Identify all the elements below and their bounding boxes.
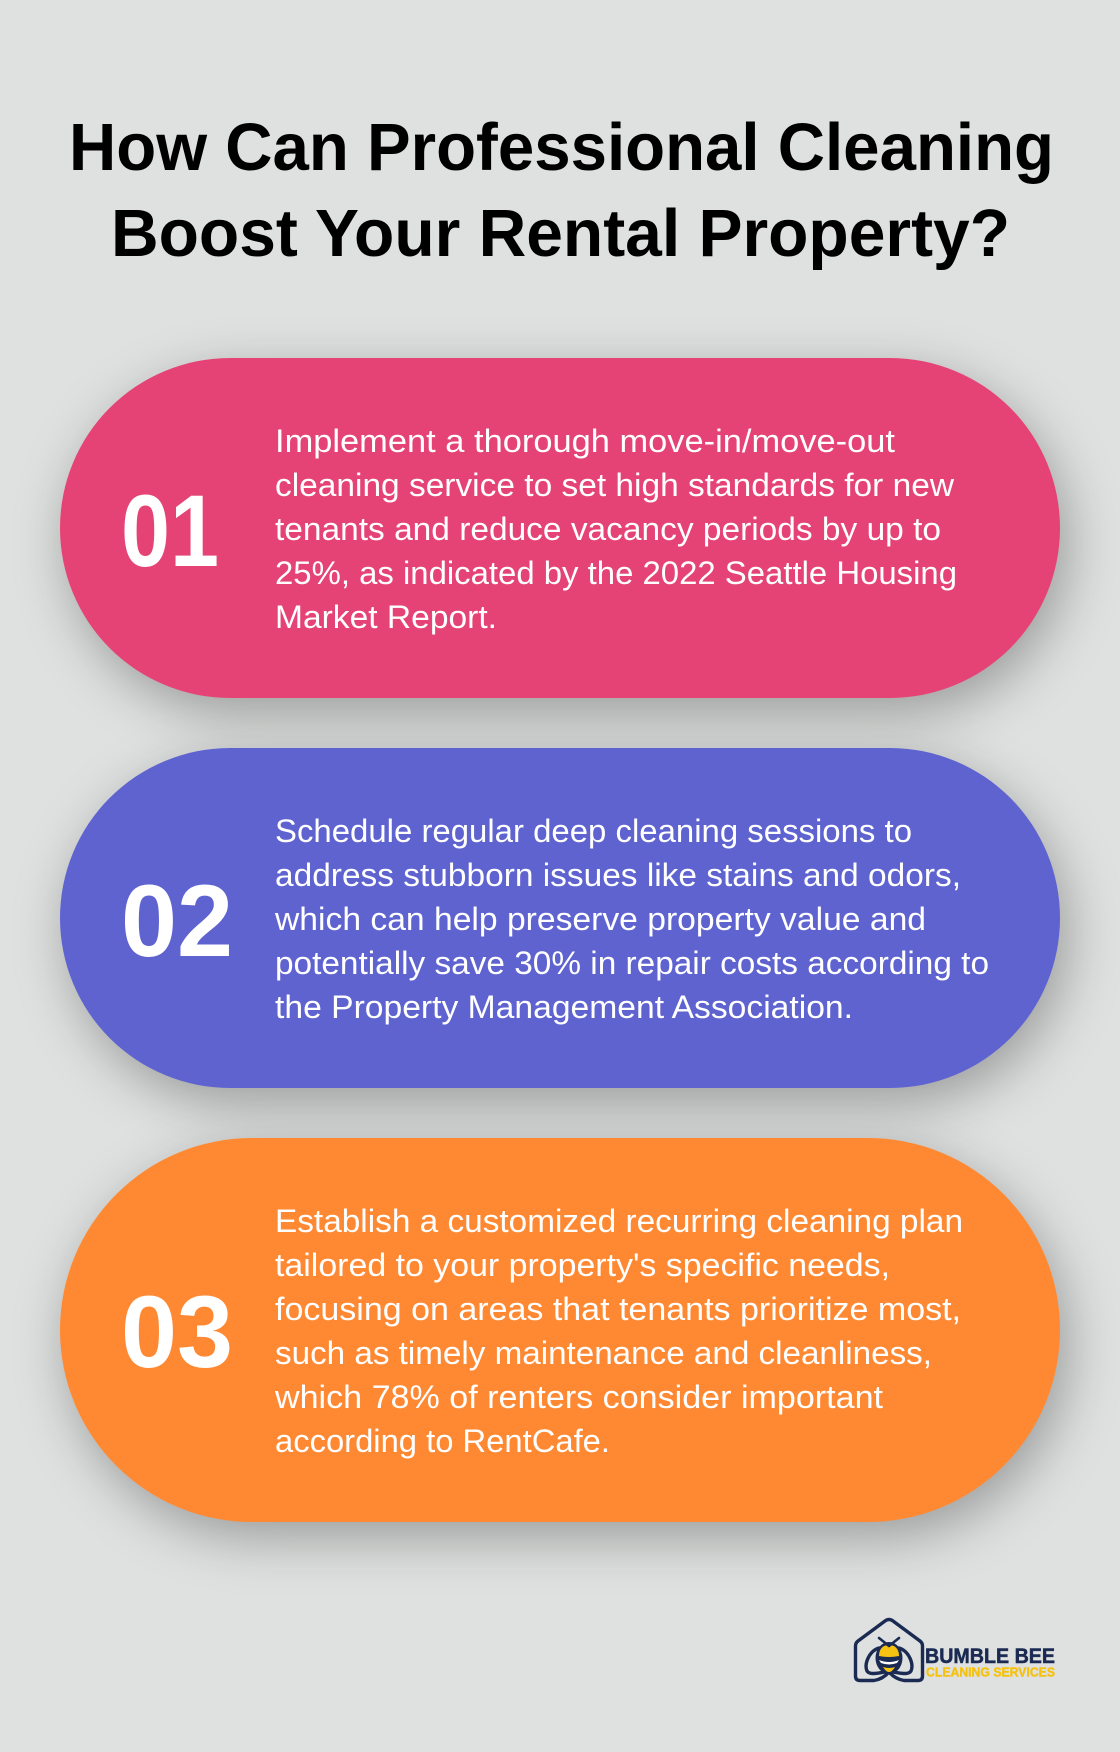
text: step 02: the Property Management Association. [275,989,853,1025]
pill background: step 02 [60,748,1060,1088]
title: How Can Professional Cleaning [69,110,1054,185]
text: step 01: tenants and reduce vacancy periods by up to [275,511,941,547]
text: step 01: 25%, as indicated by the 2022 Seattle Housing [275,555,957,591]
brand tagline: CLEANING SERVICES [926,1664,1055,1680]
text: step 03: focusing on areas that tenants prioritize most, [275,1291,961,1327]
text: step 03 [274,1203,963,1459]
text: step 01: Implement a thorough move-in/move-out [275,423,895,459]
text: step 03: such as timely maintenance and cleanliness, [275,1335,932,1371]
logo: Bumble Bee Cleaning Services [856,1620,1055,1680]
text: step 03: tailored to your property's specific needs, [275,1247,890,1283]
text: step 02: address stubborn issues like stains and odors, [275,857,961,893]
text: step 01: Market Report. [275,599,497,635]
pill background: step 01 [60,358,1060,698]
panel: step 02 [60,748,1060,1088]
icon: house with bee [856,1620,922,1680]
title [69,110,1054,271]
number 03: 03 [121,1275,233,1389]
panel: step 03 [60,1138,1060,1522]
panel: step 01 [60,358,1060,698]
text: step 02: potentially save 30% in repair costs according to [275,945,989,981]
text: step 01 [275,423,957,635]
text: step 03: Establish a customized recurring cleaning plan [275,1203,963,1239]
text: step 01: cleaning service to set high standards for new [275,467,955,503]
text: step 02 [274,813,989,1025]
title: Boost Your Rental Property? [111,196,1010,271]
text: step 03: which 78% of renters consider important [274,1379,883,1415]
number 01: 01 [121,474,219,588]
text: step 02: Schedule regular deep cleaning sessions to [275,813,912,849]
brand name: BUMBLE BEE [925,1645,1055,1668]
number 02: 02 [121,864,233,978]
text: step 03: according to RentCafe. [275,1423,610,1459]
pill background: step 03 [60,1138,1060,1522]
text: step 02: which can help preserve property value and [274,901,926,937]
